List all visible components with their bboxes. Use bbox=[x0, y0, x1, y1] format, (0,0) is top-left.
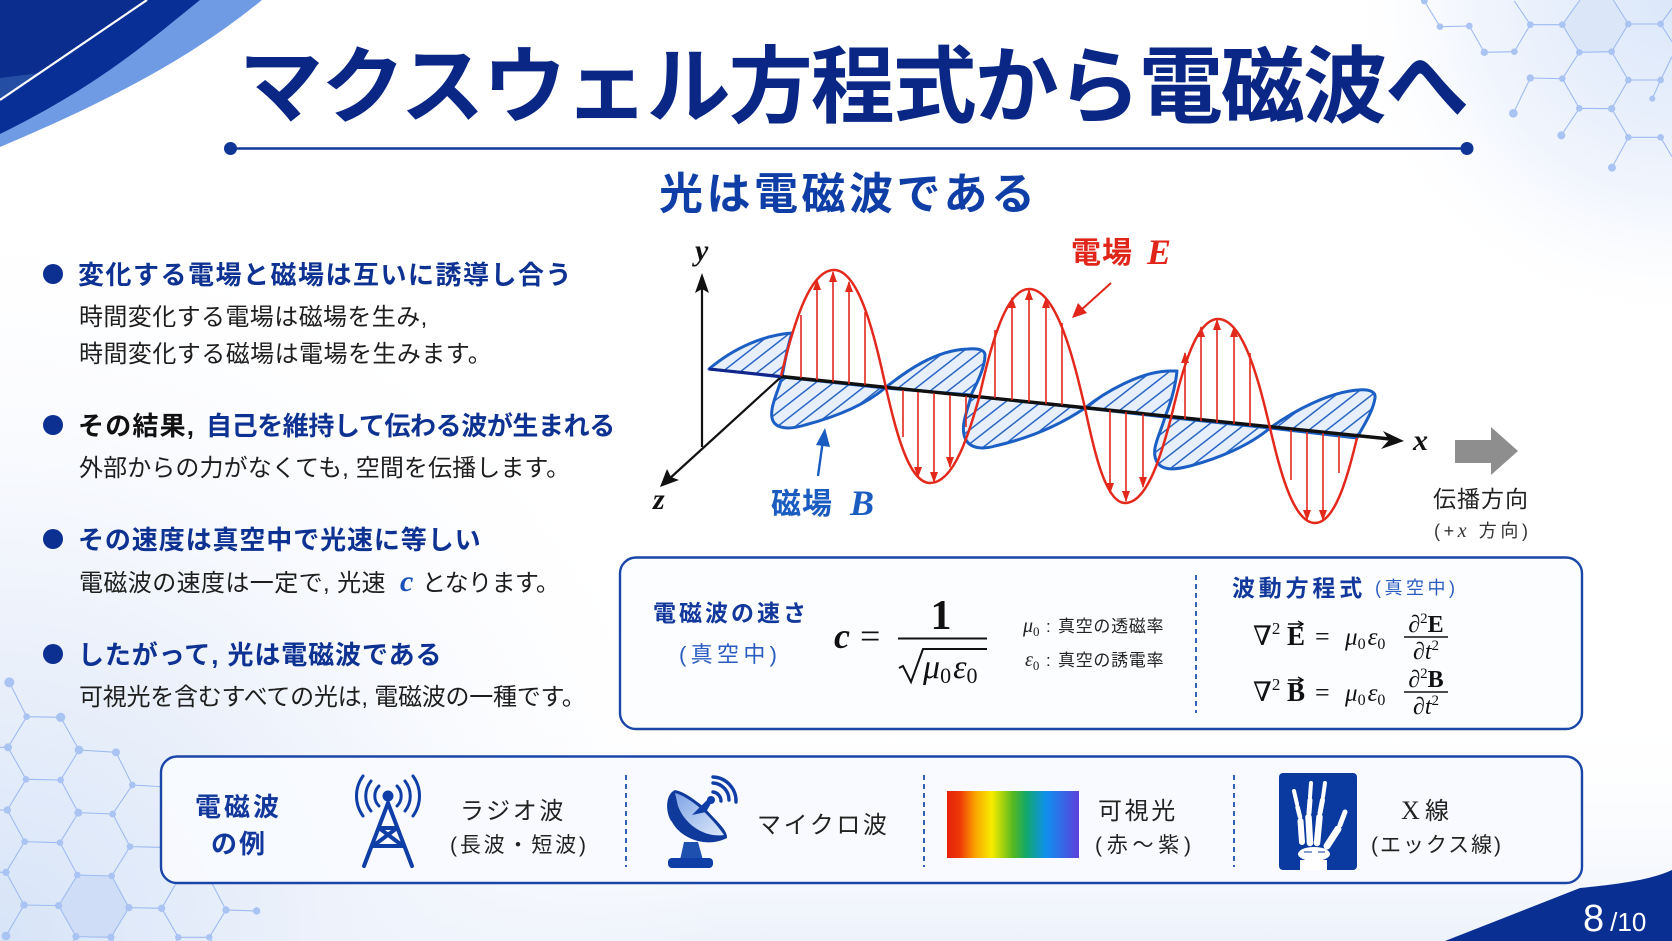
speed formula: 0 bbox=[940, 663, 951, 688]
wave equation B: 0 bbox=[1377, 692, 1385, 709]
label: electric field E bbox=[1071, 232, 1171, 318]
bullet 3: 電磁波の速度は一定で, 光速 bbox=[79, 570, 386, 597]
bullet 4: したがって, 光は電磁波である bbox=[78, 640, 442, 670]
bullet 1: 変化する電場と磁場は互いに誘導し合う bbox=[78, 260, 573, 290]
wave equation B: ∂ bbox=[1408, 667, 1420, 693]
bullet 3: その速度は真空中で光速に等しい bbox=[78, 525, 482, 555]
wave equation E: 0 bbox=[1377, 636, 1385, 653]
examples heading: の例 bbox=[211, 829, 267, 859]
examples heading: 電磁波 bbox=[195, 792, 282, 822]
wave equation E: 2 bbox=[1432, 638, 1439, 654]
propagation label: 伝播方向 bbox=[1433, 486, 1529, 512]
constants legend bbox=[1022, 615, 1164, 673]
x-ray label: 線 bbox=[1425, 798, 1449, 825]
constants legend: 0 bbox=[1033, 658, 1039, 673]
bullet 4: 可視光を含むすべての光は, 電磁波の一種です。 bbox=[79, 684, 586, 711]
y axis bbox=[695, 273, 709, 447]
icon: x-ray hand bbox=[1279, 773, 1357, 870]
title: マクスウェル方程式から電磁波へ bbox=[239, 40, 1469, 134]
wave equation E: E bbox=[1428, 612, 1444, 638]
speed heading bbox=[653, 600, 806, 667]
title rule bbox=[224, 142, 1474, 155]
visible light label bbox=[1095, 798, 1191, 857]
icon: radio tower bbox=[356, 776, 420, 866]
wave equation E: ε bbox=[1368, 624, 1378, 651]
constants legend: μ bbox=[1023, 615, 1033, 637]
axis labels: y bbox=[692, 234, 709, 267]
wave equation B: ε bbox=[1368, 680, 1378, 707]
panel: speed and wave equation bbox=[620, 558, 1582, 729]
wave equation E: ∂t bbox=[1413, 639, 1432, 665]
hexagon network: top right bbox=[1421, 0, 1672, 172]
wave equation B: μ bbox=[1345, 680, 1358, 707]
speed formula: μ bbox=[923, 649, 940, 686]
wave equation B bbox=[1253, 666, 1448, 720]
axis labels: z bbox=[652, 483, 665, 516]
bullet 1: 時間変化する磁場は電場を生みます。 bbox=[79, 341, 492, 368]
visible light label: (赤〜紫) bbox=[1095, 834, 1191, 857]
label: magnetic field B bbox=[771, 428, 874, 523]
wave equation B: B bbox=[1428, 667, 1444, 693]
bullet 3: となります。 bbox=[422, 570, 559, 597]
bullet 3 bbox=[43, 525, 559, 598]
icon: satellite dish bbox=[667, 777, 736, 868]
constants legend: 真空の誘電率 bbox=[1058, 651, 1164, 670]
electric field wave bbox=[781, 270, 1357, 523]
wave equation B: = bbox=[1315, 678, 1330, 707]
radio wave label bbox=[450, 798, 586, 857]
bullet 2: その結果, bbox=[78, 411, 195, 441]
bullet 2: 自己を維持して伝わる波が生まれる bbox=[206, 411, 615, 441]
speed formula bbox=[834, 593, 987, 688]
electromagnetic wave diagram bbox=[652, 232, 1529, 542]
wave equation E: E bbox=[1287, 621, 1305, 651]
wave equation E: ∂ bbox=[1408, 612, 1420, 638]
wave equation B: 2 bbox=[1272, 675, 1280, 694]
wave equation B: ∇ bbox=[1253, 677, 1272, 707]
speed formula: = bbox=[860, 616, 880, 656]
wave equation B: 0 bbox=[1358, 692, 1366, 709]
x-ray label: (エックス線) bbox=[1371, 834, 1501, 857]
wave equation E: 0 bbox=[1358, 636, 1366, 653]
x-ray label bbox=[1371, 796, 1501, 857]
speed formula: c bbox=[834, 616, 850, 656]
radio wave label: ラジオ波 bbox=[460, 798, 566, 825]
propagation arrow bbox=[1455, 427, 1518, 475]
subtitle: 光は電磁波である bbox=[659, 170, 1035, 219]
magnetic field wave bbox=[709, 333, 1375, 469]
label: magnetic field B: B bbox=[849, 483, 874, 523]
axis labels: x bbox=[1412, 424, 1428, 457]
axis labels bbox=[652, 234, 1428, 516]
bullet list bbox=[43, 260, 615, 711]
constants legend: : bbox=[1046, 651, 1051, 670]
propagation label bbox=[1433, 486, 1529, 542]
x axis bbox=[709, 369, 1404, 449]
bullet 3: c bbox=[400, 565, 413, 598]
wave equation E bbox=[1253, 611, 1448, 665]
bullet 1: 時間変化する電場は磁場を生み, bbox=[79, 304, 428, 331]
z axis bbox=[660, 377, 781, 487]
wave equation E: μ bbox=[1345, 624, 1358, 651]
wave equation E: = bbox=[1315, 622, 1330, 651]
constants legend: 真空の透磁率 bbox=[1058, 617, 1164, 636]
wave equation E: 2 bbox=[1272, 619, 1280, 638]
label: magnetic field B: 磁場 bbox=[771, 488, 833, 521]
wave equation B: 2 bbox=[1432, 693, 1439, 709]
speed heading: (真空中) bbox=[679, 642, 777, 667]
wave equation B: ∂t bbox=[1413, 694, 1432, 720]
speed formula: 0 bbox=[966, 663, 977, 688]
wave equation heading: (真空中) bbox=[1375, 578, 1455, 598]
speed formula: ε bbox=[953, 649, 967, 686]
bullet 4 bbox=[43, 640, 586, 711]
hexagon network: bottom left bbox=[0, 677, 260, 941]
label: electric field E: 電場 bbox=[1071, 237, 1133, 270]
wave equation E: ∇ bbox=[1253, 621, 1272, 651]
propagation label: (+x 方向) bbox=[1434, 520, 1528, 542]
icon: visible spectrum bbox=[947, 791, 1079, 858]
page number: 8/10 bbox=[1583, 898, 1646, 940]
label: electric field E: E bbox=[1146, 232, 1171, 272]
bullet 1 bbox=[43, 260, 573, 368]
page corner shape bbox=[1445, 870, 1672, 941]
constants legend: ε bbox=[1025, 649, 1033, 671]
visible light label: 可視光 bbox=[1098, 798, 1178, 825]
speed heading: 電磁波の速さ bbox=[653, 600, 806, 626]
wave equation heading: 波動方程式 bbox=[1232, 575, 1366, 601]
corner decoration: top left bbox=[0, 0, 262, 147]
examples heading bbox=[195, 792, 282, 859]
wave equation heading bbox=[1232, 575, 1455, 601]
speed formula: 1 bbox=[930, 593, 952, 639]
constants legend: : bbox=[1046, 617, 1051, 636]
x-ray label: X bbox=[1401, 796, 1420, 825]
wave equation B: 2 bbox=[1420, 666, 1428, 682]
bullet 2: 外部からの力がなくても, 空間を伝播します。 bbox=[79, 455, 570, 482]
radio wave label: (長波・短波) bbox=[450, 834, 586, 857]
wave equation E: 2 bbox=[1420, 611, 1428, 627]
constants legend: 0 bbox=[1033, 624, 1040, 639]
wave equation B: B bbox=[1287, 677, 1305, 707]
panel: examples of electromagnetic waves bbox=[161, 756, 1582, 883]
bullet 2 bbox=[43, 411, 615, 482]
microwave label: マイクロ波 bbox=[757, 812, 890, 839]
